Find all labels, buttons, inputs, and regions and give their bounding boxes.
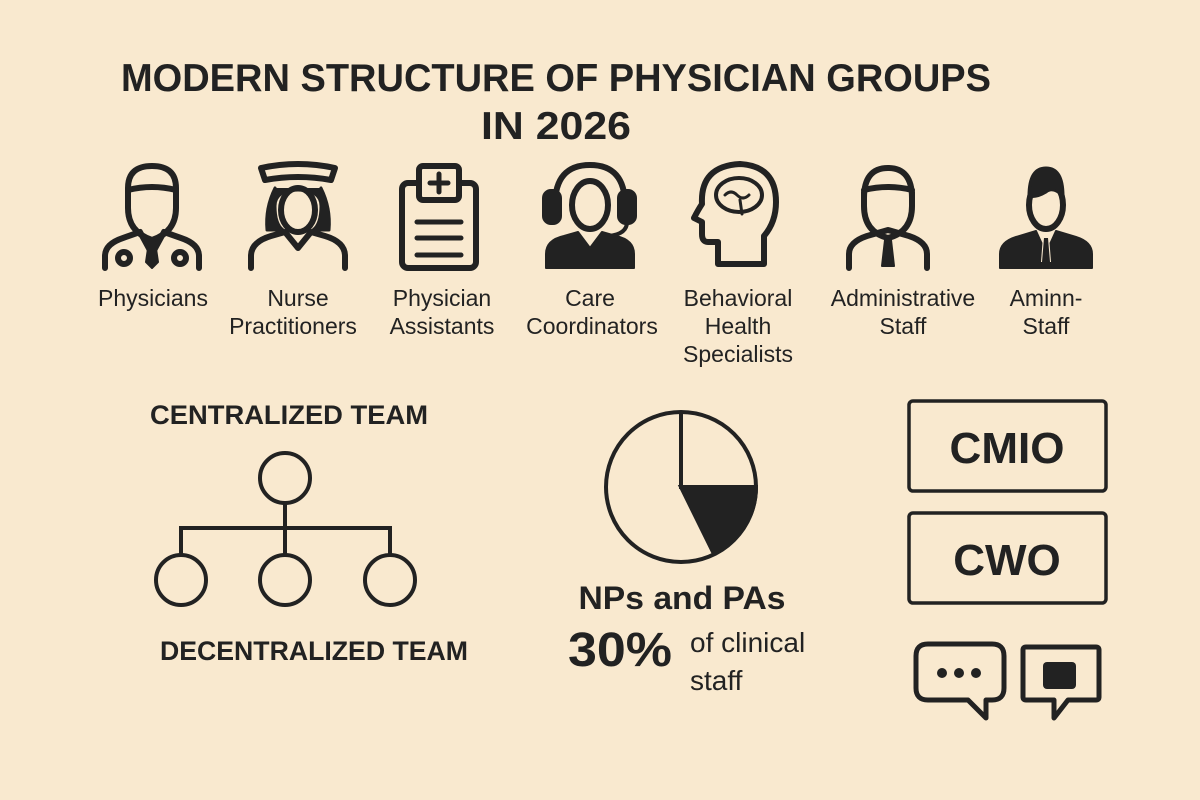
icon labels: Staff xyxy=(1023,313,1070,339)
icon labels: Coordinators xyxy=(526,313,658,339)
title xyxy=(121,57,991,148)
stat: NPs and PAs: 30% xyxy=(568,624,672,677)
org tree diagram xyxy=(156,453,415,605)
stat: NPs and PAs: NPs and PAs xyxy=(578,580,786,616)
icon labels: Health xyxy=(705,313,771,339)
title: MODERN STRUCTURE OF PHYSICIAN GROUPS xyxy=(121,57,991,100)
icon labels: Behavioral xyxy=(684,285,792,311)
title: IN 2026 xyxy=(481,105,631,148)
pie chart xyxy=(606,412,756,562)
box: CWO xyxy=(909,513,1106,603)
icon labels: Administrative xyxy=(831,285,975,311)
icon labels: Staff xyxy=(880,313,927,339)
icon labels: Assistants xyxy=(390,313,494,339)
box: CMIO: CMIO xyxy=(950,424,1064,473)
icon: administrative staff xyxy=(849,168,927,268)
icon: clipboard xyxy=(402,166,476,268)
icon: brain head xyxy=(694,164,776,264)
icon labels: Aminn- xyxy=(1010,285,1082,311)
stat: NPs and PAs: staff xyxy=(690,665,743,696)
icon labels: Physician xyxy=(393,285,491,311)
icon labels: Care xyxy=(565,285,615,311)
icon labels: Specialists xyxy=(683,341,793,367)
heading: decentralized team: DECENTRALIZED TEAM xyxy=(160,636,468,666)
box: CWO: CWO xyxy=(953,536,1061,585)
icon: nurse xyxy=(251,164,345,268)
box: CMIO xyxy=(909,401,1106,491)
icon: care coordinator xyxy=(545,165,634,268)
icon: chat bubbles xyxy=(916,644,1099,718)
icon row xyxy=(105,164,1092,268)
icon: physician xyxy=(105,166,199,268)
icon labels: Practitioners xyxy=(229,313,357,339)
icon labels xyxy=(98,285,1082,367)
icon labels: Physicians xyxy=(98,285,208,311)
stat: NPs and PAs xyxy=(568,580,805,696)
icon labels: Nurse xyxy=(267,285,329,311)
heading: centralized team: CENTRALIZED TEAM xyxy=(150,400,428,430)
icon: staff suited xyxy=(1000,168,1092,268)
stat: NPs and PAs: of clinical xyxy=(690,627,805,658)
